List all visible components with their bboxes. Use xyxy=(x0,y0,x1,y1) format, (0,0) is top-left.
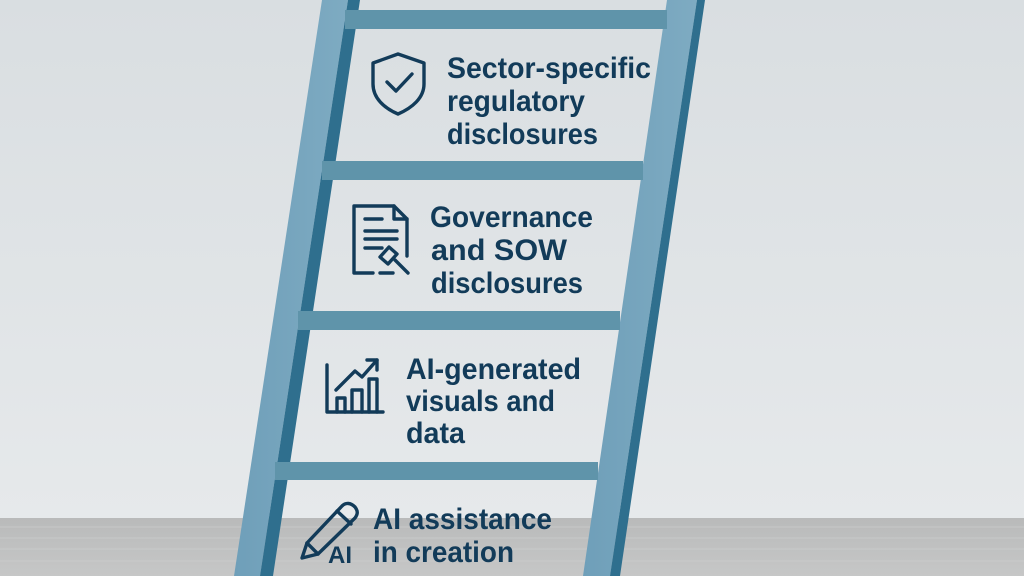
text: AI-generated: AI-generated xyxy=(406,353,581,386)
text: disclosures: disclosures xyxy=(431,267,583,300)
rung 1 xyxy=(345,10,667,29)
text: disclosures: disclosures xyxy=(447,118,598,151)
floor xyxy=(0,518,1024,576)
text: AI assistance: AI assistance xyxy=(373,503,552,536)
rung 4 xyxy=(275,462,598,480)
rung 2 xyxy=(322,161,643,180)
text: visuals and: visuals and xyxy=(406,385,555,418)
text: in creation: in creation xyxy=(373,536,514,569)
right rail xyxy=(583,0,705,576)
ladder xyxy=(234,0,705,576)
step: governance and SOW disclosures xyxy=(354,201,593,300)
text: governance: Governance xyxy=(430,201,593,234)
step: AI-generated visuals and data xyxy=(327,353,581,450)
text: sector-specific: Sector-specific xyxy=(447,52,651,85)
step: AI assistance in creation xyxy=(302,503,552,569)
icon: document with gavel xyxy=(354,206,408,273)
icon: shield with check xyxy=(373,54,424,114)
text: and SOW: and SOW xyxy=(431,234,567,267)
icon: pencil with AI: AI xyxy=(328,542,352,569)
rung 3 xyxy=(298,311,620,330)
left rail xyxy=(234,0,360,576)
icon: rising bar chart xyxy=(327,360,383,412)
step: sector-specific regulatory disclosures xyxy=(373,52,651,151)
icon: pencil with AI xyxy=(302,503,357,569)
text: regulatory: regulatory xyxy=(447,85,586,118)
text: data: data xyxy=(406,417,466,450)
